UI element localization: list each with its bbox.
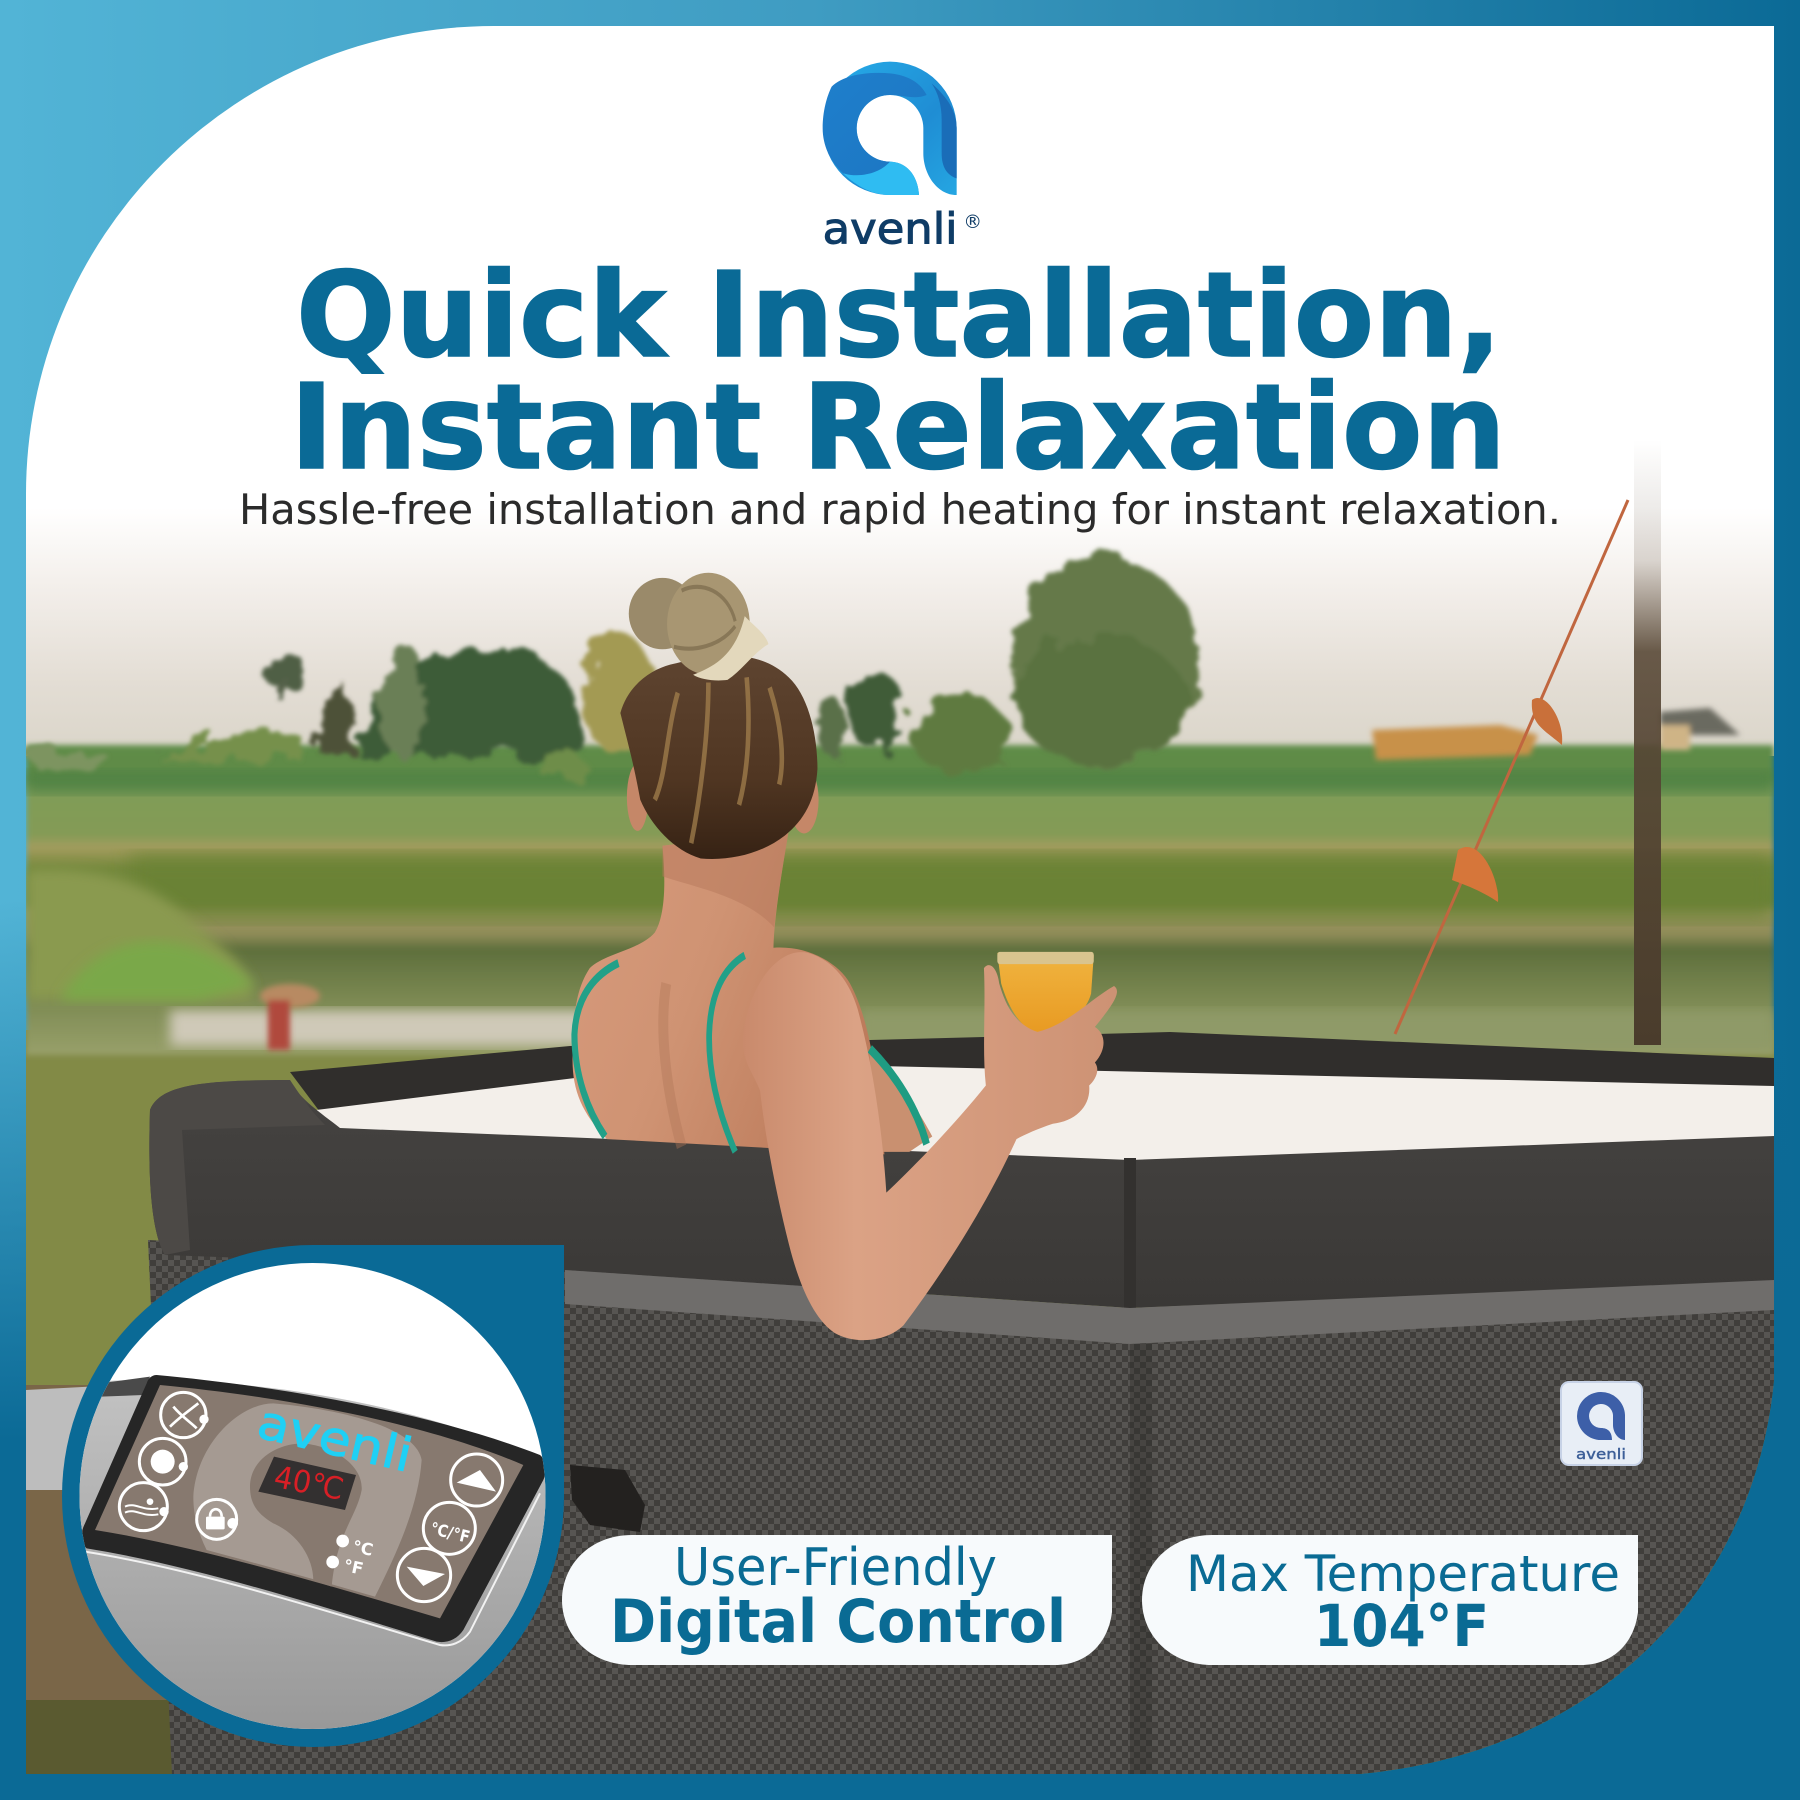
unit grey body bbox=[50, 1380, 570, 1760]
rope with ribbons bbox=[1395, 500, 1628, 1034]
pill: digital control: User-Friendly bbox=[674, 1538, 997, 1598]
logo mark bbox=[823, 62, 957, 195]
pill: digital control bbox=[562, 1535, 1112, 1665]
hair highlights bbox=[655, 677, 782, 843]
registered mark: ® bbox=[963, 212, 982, 233]
tree line bbox=[30, 557, 1199, 779]
unit toggle labels bbox=[342, 1519, 472, 1579]
woman bbox=[573, 573, 1117, 1340]
scarecrow in the grass bbox=[260, 984, 320, 1050]
light blob bbox=[193, 1403, 422, 1597]
hot tub bbox=[148, 1032, 1774, 1775]
button icons bbox=[125, 1403, 496, 1586]
left bracket strip bbox=[100, 1377, 150, 1397]
pill: max temperature: 104°F bbox=[1314, 1592, 1489, 1660]
temperature display: 40℃ bbox=[271, 1460, 347, 1508]
neck shadow bbox=[662, 830, 789, 927]
pill: max temperature bbox=[1142, 1535, 1638, 1665]
mode buttons bbox=[119, 1392, 503, 1602]
swimsuit strap right side bbox=[870, 1049, 927, 1144]
field and pond landscape bbox=[26, 745, 1774, 1055]
unit toggle labels: °F bbox=[342, 1556, 365, 1579]
buckle bbox=[570, 1465, 645, 1532]
mesh wall bbox=[148, 1240, 1774, 1775]
inset blue badge bbox=[62, 1245, 564, 1747]
ground base bbox=[26, 1030, 1774, 1775]
tub brand badge: avenli bbox=[1576, 1447, 1626, 1463]
title: Quick Installation, bbox=[296, 246, 1502, 384]
avenli logo bbox=[823, 62, 982, 254]
hair bbox=[620, 656, 817, 859]
left foreground box bbox=[26, 1385, 172, 1774]
panel bezel bbox=[81, 1375, 546, 1642]
rim seam bbox=[1124, 1158, 1136, 1308]
water surface bbox=[300, 1066, 1774, 1165]
unit toggle labels: °C bbox=[351, 1537, 375, 1560]
grey band bbox=[565, 1270, 1774, 1344]
corner pad bbox=[149, 1080, 325, 1255]
left strap bbox=[574, 963, 618, 1137]
scrunchie bbox=[693, 616, 768, 680]
taupe face bbox=[95, 1385, 523, 1618]
wooden pole bbox=[1634, 440, 1661, 1045]
control panel inset bbox=[50, 1245, 570, 1760]
chest side bbox=[869, 1050, 932, 1152]
right strap bbox=[709, 955, 745, 1152]
spine shadow bbox=[663, 983, 682, 1147]
back rim bbox=[290, 1032, 1774, 1112]
title bbox=[290, 246, 1506, 496]
unit toggle labels: °C/°F bbox=[428, 1519, 472, 1547]
pill: digital control: Digital Control bbox=[610, 1587, 1066, 1657]
ears bbox=[627, 764, 819, 833]
cyan brand: avenli bbox=[252, 1396, 417, 1484]
farm buildings bbox=[1372, 708, 1740, 760]
subtitle: Hassle-free installation and rapid heating for instant relaxation. bbox=[239, 485, 1561, 534]
logo wordmark: avenli bbox=[823, 204, 958, 254]
title: Instant Relaxation bbox=[290, 358, 1506, 496]
inset white circle bbox=[80, 1263, 546, 1729]
glass of juice bbox=[997, 952, 1094, 1033]
hair buns bbox=[629, 573, 750, 675]
mesh seam bbox=[1130, 1330, 1152, 1775]
neck and back bbox=[573, 830, 884, 1154]
pill: max temperature: Max Temperature bbox=[1186, 1545, 1620, 1603]
sky bbox=[26, 26, 1774, 756]
arm and hand bbox=[743, 952, 1117, 1340]
tub brand badge bbox=[1561, 1382, 1642, 1465]
panel white edge bbox=[85, 1493, 540, 1645]
control unit bbox=[50, 1375, 570, 1760]
dark blob bbox=[250, 1443, 362, 1587]
padded front rim bbox=[149, 1080, 1774, 1308]
